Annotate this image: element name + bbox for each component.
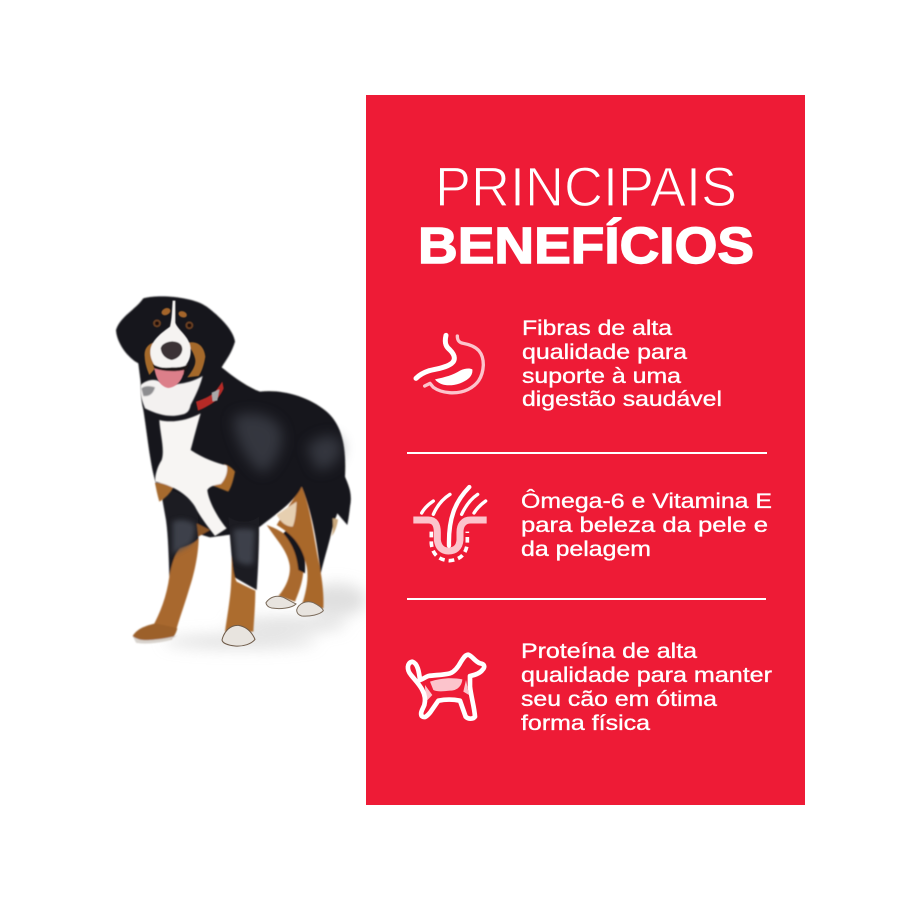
nose: [161, 341, 182, 360]
eyebrows: [160, 307, 172, 317]
blaze and muzzle: [150, 301, 191, 368]
text: fibras: Fibras de alta: [522, 317, 672, 340]
mouth: [153, 363, 189, 375]
text: fibras: qualidade para: [522, 341, 687, 364]
white chest: [155, 413, 227, 536]
far hind leg: [267, 525, 303, 602]
icon: stomach: [416, 335, 483, 393]
body and head black silhouette: [116, 296, 351, 573]
heading: principais: PRINCIPAIS: [435, 155, 737, 218]
paws: [222, 596, 323, 646]
icon: skin and hair: [413, 487, 487, 561]
text: fibras: [522, 317, 722, 411]
right front paw: [222, 625, 255, 646]
near hind leg: [277, 487, 323, 608]
illustration: Bernese mountain dog: [116, 296, 367, 648]
text: ômega: Ômega-6 e Vitamina E: [521, 490, 772, 513]
fur highlights: [233, 413, 342, 473]
white neck ruff: [140, 376, 203, 416]
right front leg: [228, 517, 259, 590]
panel: benefits: [366, 95, 805, 805]
text: proteína: seu cão em ótima: [521, 688, 717, 711]
icon: dog: [408, 655, 484, 719]
text: fibras: suporte à uma: [522, 365, 681, 388]
tan front shoulder patches: [155, 483, 174, 502]
left front paw: [133, 623, 177, 643]
text: proteína: forma física: [521, 712, 650, 735]
text: proteína: Proteína de alta: [521, 640, 697, 663]
eyes: [153, 319, 161, 327]
ground shadow: [163, 583, 367, 648]
text: ômega: [521, 490, 772, 561]
rear thigh light: [277, 502, 297, 527]
tongue: [154, 368, 184, 388]
heading: benefícios: BENEFÍCIOS: [418, 217, 754, 274]
far hind paw: [266, 596, 296, 609]
collar: [196, 382, 224, 411]
text: ômega: para beleza da pele e: [521, 514, 768, 537]
tail fringe: [331, 518, 338, 537]
text: ômega: da pelagem: [521, 538, 651, 561]
left front leg: [160, 487, 199, 577]
tan cheeks: [145, 342, 157, 375]
text: proteína: [521, 640, 772, 735]
text: proteína: qualidade para manter: [521, 664, 772, 687]
near hind paw: [297, 602, 323, 616]
text: fibras: digestão saudável: [522, 388, 722, 411]
